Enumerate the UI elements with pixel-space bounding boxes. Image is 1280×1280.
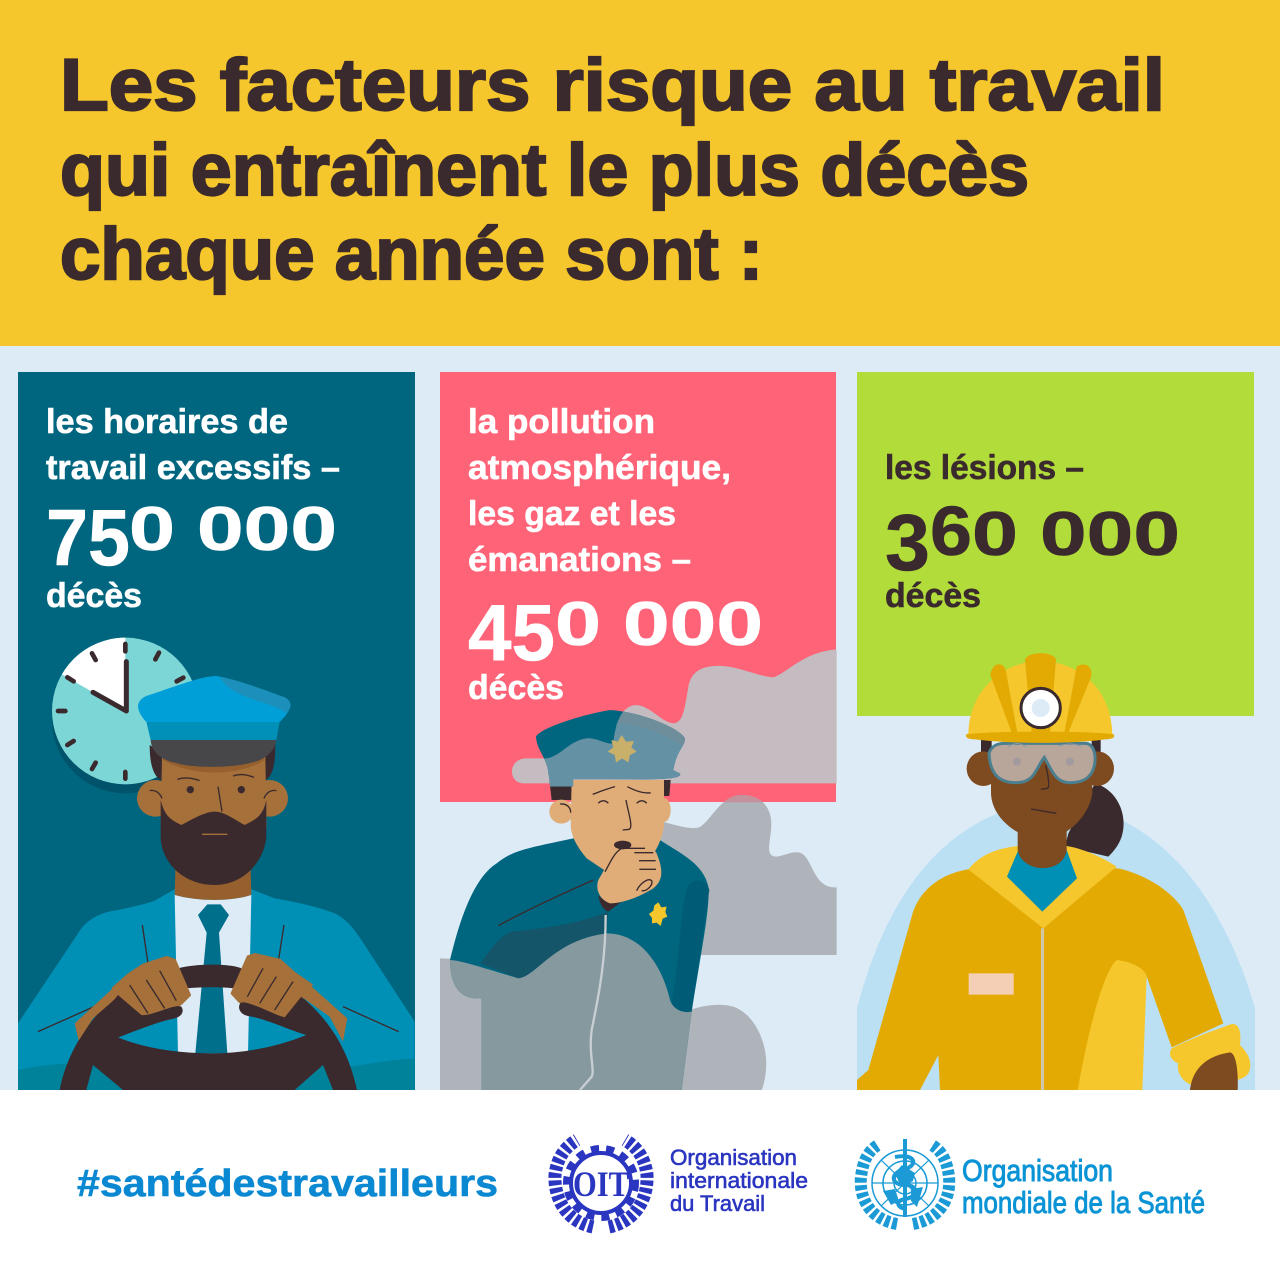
ponytail [1065, 783, 1124, 857]
shirt [175, 895, 251, 1053]
hashtag: #santédestravailleurs [77, 1163, 498, 1205]
title banner: chaque année sont : [60, 214, 763, 295]
jacket lines [38, 925, 399, 1032]
tie [195, 904, 229, 1053]
panel: injuries [857, 372, 1255, 1090]
text: working hours label: décès [46, 577, 142, 615]
facial features [150, 775, 276, 834]
illustration: miner [857, 653, 1255, 1090]
panel: excessive working hours [18, 372, 415, 1090]
hair sides [150, 745, 275, 781]
text: pollution label [468, 403, 763, 707]
text: injuries label: 3 [885, 498, 930, 587]
text: pollution label: les gaz et les [468, 495, 676, 533]
text: WHO name [962, 1153, 1205, 1220]
text: working hours label: 0 [129, 495, 175, 564]
jacket cord [580, 915, 606, 1090]
smoke: upper cloud [512, 649, 837, 783]
text: pollution label: 45 [468, 588, 555, 677]
title banner [0, 0, 1280, 346]
light blue content band [0, 346, 1280, 1090]
text: injuries label: les lésions – [885, 449, 1084, 487]
text: ILO name: internationale [670, 1168, 808, 1193]
hand over mouth [597, 841, 661, 912]
smoke over torso [450, 933, 692, 1090]
cuff [1170, 1024, 1250, 1085]
name badge [969, 973, 1014, 995]
text: injuries label [885, 449, 1180, 615]
smoke over cap [544, 712, 685, 786]
text: ILO name [670, 1145, 808, 1216]
hand [1190, 1052, 1238, 1090]
illustration: officer coughing in smoke [440, 649, 837, 1090]
text: WHO name: Organisation [962, 1153, 1113, 1188]
jacket [18, 889, 415, 1090]
collar [968, 846, 1117, 928]
icon: WHO emblem [861, 1139, 949, 1224]
ears [137, 780, 174, 817]
undershirt [1007, 850, 1077, 912]
officer body [450, 838, 709, 1090]
illustration: driver with clock [18, 638, 415, 1090]
text: working hours label: 000 [197, 495, 337, 564]
text: pollution label: décès [468, 669, 564, 707]
text: injuries label: 000 [1040, 500, 1180, 569]
ground strip [18, 1058, 415, 1090]
hands on wheel [85, 954, 335, 1037]
text: working hours label: 75 [46, 493, 130, 582]
zip [1041, 928, 1044, 1090]
forearms [75, 983, 347, 1042]
neck [1018, 827, 1067, 868]
text: ILO name: du Travail [670, 1191, 765, 1216]
left forearm [480, 892, 608, 978]
text: pollution label: émanations – [468, 541, 691, 579]
icon: ILO emblem [555, 1140, 647, 1227]
safety goggles [989, 743, 1095, 783]
right arm [672, 880, 709, 1012]
text: WHO name: mondiale de la Santé [962, 1185, 1205, 1220]
head [549, 780, 671, 871]
lighter sleeve [1078, 960, 1147, 1090]
text: working hours label: les horaires de [46, 403, 288, 441]
title banner: qui entraînent le plus décès [60, 130, 1029, 211]
neck [175, 870, 251, 900]
cap star [608, 735, 637, 763]
face [161, 757, 267, 827]
text: injuries label: 6 [930, 492, 972, 570]
icon: officer cap [536, 710, 685, 779]
text: injuries label: 0 [972, 500, 1018, 569]
text: pollution label: la pollution [468, 403, 655, 441]
beard [161, 800, 266, 885]
text: pollution label: 000 [623, 590, 763, 659]
smoke: right cloud [653, 795, 837, 955]
icon: driver cap [138, 676, 290, 767]
title banner: Les facteurs risque au travail [60, 45, 1165, 126]
text: working hours label [46, 403, 340, 615]
icon: ILO emblem: OIT [573, 1164, 629, 1204]
smoke: lower cloud [440, 958, 766, 1090]
icon: hard hat with lamp [966, 653, 1114, 743]
text: injuries label: décès [885, 577, 981, 615]
badge [649, 902, 667, 926]
logo: WHO [861, 1139, 1205, 1224]
head [967, 738, 1114, 840]
panel: air pollution [440, 372, 837, 1090]
wheel spoke gaps [86, 1065, 333, 1090]
icon: clock [52, 638, 199, 793]
steering wheel [60, 965, 357, 1090]
logo: ILO [555, 1140, 808, 1227]
text: pollution label: atmosphérique, [468, 449, 731, 487]
background arch [857, 812, 1255, 1090]
text: ILO name: Organisation [670, 1145, 797, 1170]
text: pollution label: 0 [555, 590, 601, 659]
text: working hours label: travail excessifs – [46, 449, 340, 487]
jacket [857, 868, 1223, 1090]
sleeve line [498, 880, 593, 926]
